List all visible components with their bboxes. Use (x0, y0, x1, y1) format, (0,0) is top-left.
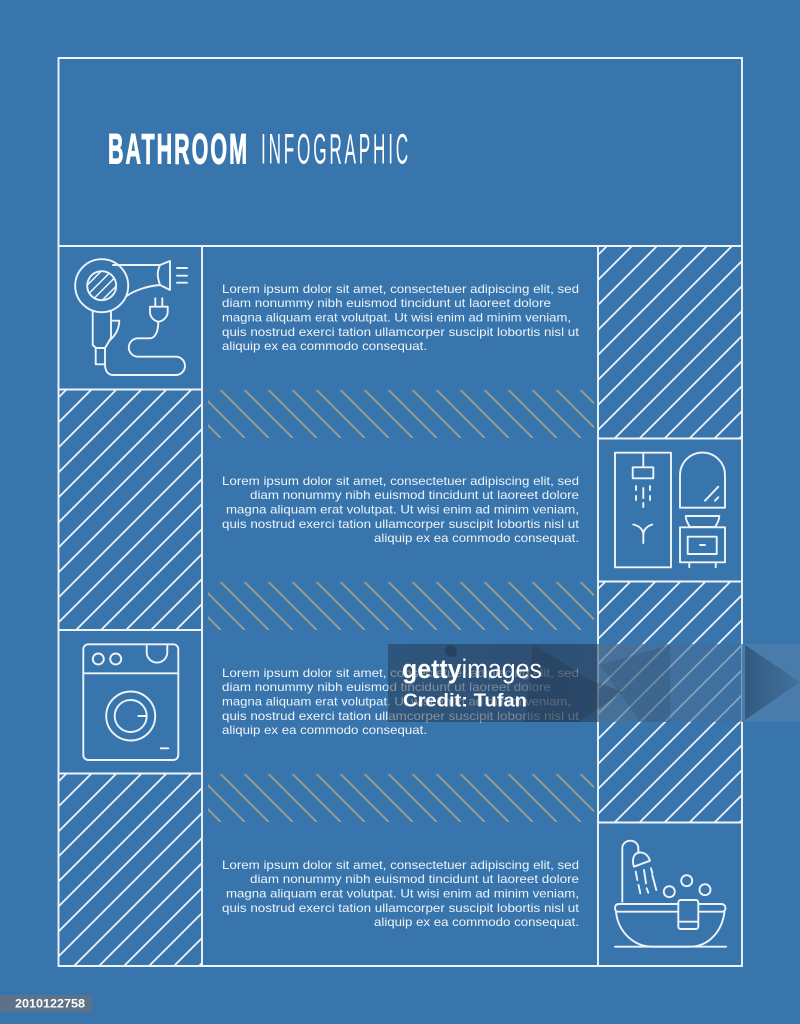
hatched panel: left upper (59, 389, 202, 630)
text block 1 (222, 283, 580, 353)
text block 2: Lorem ipsum dolor sit amet, consectetuer adipiscing elit, sed (222, 475, 579, 488)
text block 2: diam nonummy nibh euismod tincidunt ut laoreet dolore (250, 489, 579, 502)
text block 4: aliquip ex ea commodo consequat. (374, 916, 579, 929)
text block 3: quis nostrud exerci tation ullamcorper suscipit lobortis nisl ut (222, 710, 580, 723)
infographic canvas: INFOGRAPHIC (261, 126, 411, 174)
frame and grid lines (58, 58, 742, 966)
text block 1: aliquip ex ea commodo consequat. (222, 340, 427, 353)
text block 3: Lorem ipsum dolor sit amet, consectetuer adipiscing elit, sed (222, 667, 579, 680)
text block 3 (222, 667, 580, 737)
text block 1: quis nostrud exerci tation ullamcorper suscipit lobortis nisl ut (222, 326, 580, 339)
icon: hair dryer (75, 259, 187, 375)
hatched panel: right upper (598, 246, 742, 438)
text block 4 (222, 859, 580, 929)
hatched panel: left lower (59, 773, 202, 966)
gold hatched divider 3 (208, 774, 594, 822)
text block 3: magna aliquam erat volutpat. Ut wisi enim ad minim veniam, (222, 696, 571, 708)
text block 1: Lorem ipsum dolor sit amet, consectetuer adipiscing elit, sed (222, 283, 579, 296)
hatched panel: right lower (598, 581, 742, 822)
text block 2 (222, 475, 580, 545)
text block 2: magna aliquam erat volutpat. Ut wisi enim ad minim veniam, (226, 504, 579, 516)
watermark credit text: Credit: Tufan (403, 690, 527, 710)
icon: shower and vanity (615, 453, 725, 567)
icon: bathtub with shower (615, 841, 726, 947)
text block 2: quis nostrud exerci tation ullamcorper suscipit lobortis nisl ut (222, 518, 580, 531)
text block 4: Lorem ipsum dolor sit amet, consectetuer adipiscing elit, sed (222, 859, 579, 872)
icon: washing machine (83, 644, 178, 760)
title: BATHROOM (108, 126, 249, 174)
text block 1: magna aliquam erat volutpat. Ut wisi enim ad minim veniam, (222, 312, 571, 324)
text block 2: aliquip ex ea commodo consequat. (374, 532, 579, 545)
gold hatched divider 2 (208, 582, 594, 630)
watermark band (388, 644, 800, 722)
text block 4: quis nostrud exerci tation ullamcorper suscipit lobortis nisl ut (222, 902, 580, 915)
watermark logo text: gettyimages (402, 654, 542, 684)
text block 4: diam nonummy nibh euismod tincidunt ut laoreet dolore (250, 873, 579, 886)
image id tag: 2010122758 (15, 996, 85, 1010)
text block 1: diam nonummy nibh euismod tincidunt ut laoreet dolore (222, 297, 551, 310)
image id tag (0, 995, 92, 1012)
text block 3: aliquip ex ea commodo consequat. (222, 724, 427, 737)
gold hatched divider 1 (208, 390, 594, 438)
text block 3: diam nonummy nibh euismod tincidunt ut laoreet dolore (222, 681, 551, 694)
text block 4: magna aliquam erat volutpat. Ut wisi enim ad minim veniam, (226, 888, 579, 900)
